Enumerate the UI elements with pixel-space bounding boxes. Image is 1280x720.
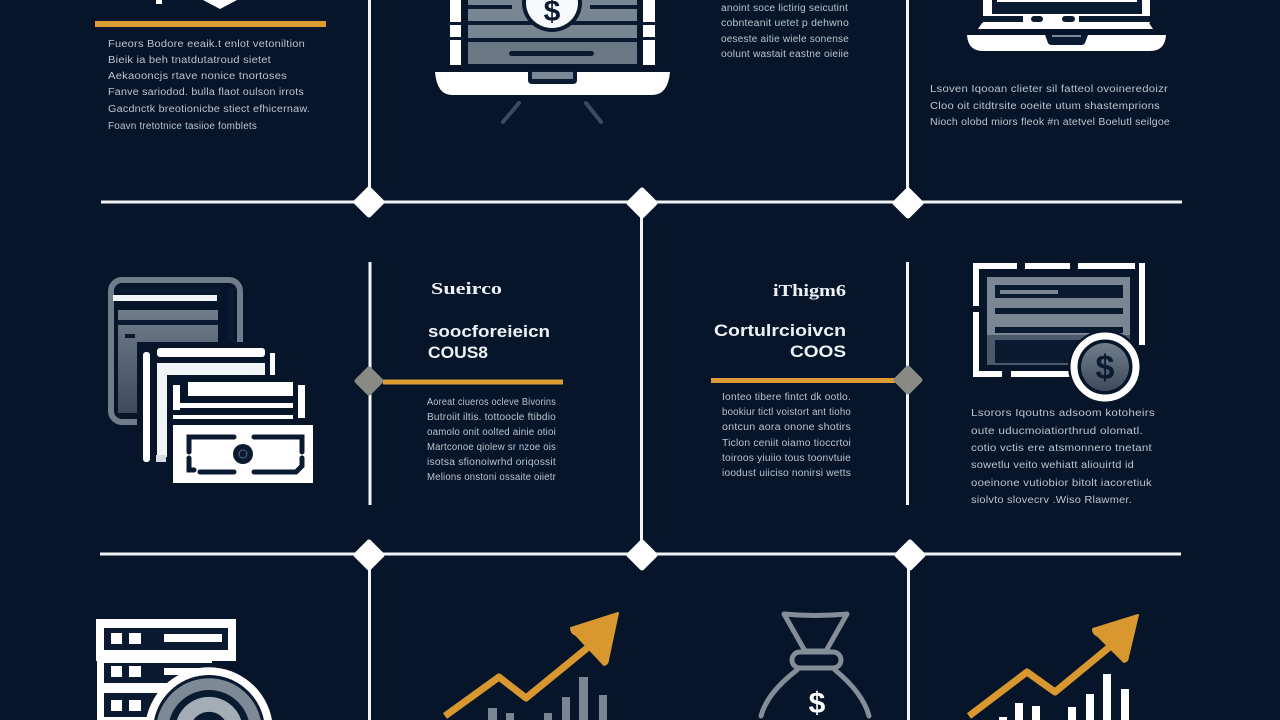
icon: laptop top right xyxy=(967,0,1166,51)
text block: lower right: sowetlu veito wehiatt aliouirtd id xyxy=(971,460,1134,471)
panel: top middle text xyxy=(721,3,849,60)
icon: money bag: $ xyxy=(809,687,826,720)
heading: costs title xyxy=(428,322,550,362)
text block: top right xyxy=(930,84,1170,128)
text block: middle left: Martconoe qiolew sr nzoe ois xyxy=(427,442,556,453)
panel: top middle text: oeseste aitie wiele sonense xyxy=(721,34,849,45)
text block: middle right: toiroos yiuiio tous toonvtuie xyxy=(722,453,851,464)
chart: growth arrow with white bars xyxy=(969,615,1138,720)
text block: middle right: ontcun aora onone shotirs xyxy=(722,422,851,433)
text block: middle right: Ticlon ceniit oiamo tioccrtoi xyxy=(722,438,851,449)
connector: gold line with grey node xyxy=(357,369,563,393)
panel: top left xyxy=(95,0,326,132)
chart: growth arrow with grey bars xyxy=(445,613,618,720)
text block: top left xyxy=(108,39,310,132)
text block: middle left: Melions onstoni ossaite oiietr xyxy=(427,472,556,483)
text block: top left: Fanve sariodod. bulla flaot oulson irrots xyxy=(108,87,304,98)
icon: laptop with dollar coin xyxy=(435,0,670,122)
text block: middle right: bookiur tictl voistort ant tioho xyxy=(722,407,851,418)
text block: middle right xyxy=(722,392,851,479)
panel: top middle text: cobnteanit uetet p dehwno xyxy=(721,18,849,29)
gold divider xyxy=(95,21,326,27)
text block: middle right: Ionteo tibere fintct dk ootlo. xyxy=(722,392,851,403)
icon: shield fragment xyxy=(156,0,237,9)
text block: lower right: siolvto slovecrv .Wiso Rlawmer. xyxy=(971,495,1132,506)
text block: top left: Gacdnctk breotionicbe stiect efhicernaw. xyxy=(108,104,310,115)
text block: top left: Fueors Bodore eeaik.t enlot vetoniltion xyxy=(108,39,305,50)
text block: lower right: cotio vctis ere atsmonnero tnetant xyxy=(971,443,1152,454)
connector: gold line with grey node xyxy=(711,368,920,392)
text block: lower right: oute uducmoiatiorthrud olomatl. xyxy=(971,426,1143,437)
panel: middle left text xyxy=(357,279,563,483)
heading: costs title: COUS8 xyxy=(428,343,488,362)
heading: things: iThigm6 xyxy=(773,281,846,300)
text block: middle left: oamolo onit oolted ainie otioi xyxy=(427,427,556,438)
text block: lower right xyxy=(971,408,1155,506)
heading: costs title: soocforeieicn xyxy=(428,322,550,341)
icon: stacked cards and banknote xyxy=(111,280,313,483)
text block: middle left: Aoreat ciueros ocleve Bivorins xyxy=(427,397,556,408)
text block: middle left: Butroiit iltis. tottoocle ftibdio xyxy=(427,412,556,423)
text block: top right: Cloo oit citdtrsite ooeite utum shastemprions xyxy=(930,101,1160,112)
heading: contribution costs: Cortulrcioivcn xyxy=(714,321,846,340)
text block: top left: Aekaooncjs rtave nonice tnortoses xyxy=(108,71,287,82)
heading: source: Sueirco xyxy=(431,279,502,298)
panel: top middle text: oolunt wastait eastne oieiie xyxy=(721,49,849,60)
text block: middle right: ioodust uiiciso nonirsi wetts xyxy=(722,468,851,479)
panel: top middle text: anoint soce lictirig seicutint xyxy=(721,3,848,14)
text block: top right: Lsoven Iqooan clieter sil fatteol ovoineredoizr xyxy=(930,84,1169,95)
icon: server with target xyxy=(96,619,272,720)
heading: contribution costs: COOS xyxy=(790,342,846,361)
text block: middle left xyxy=(427,397,556,483)
heading: contribution costs xyxy=(714,321,846,361)
text block: top left: Bieik ia beh tnatdutatroud sietet xyxy=(108,55,271,66)
text block: lower right: ooeinone vutiobior bitolt iacoretiuk xyxy=(971,478,1153,489)
text block: lower right: Lsorors Iqoutns adsoom kotoheirs xyxy=(971,408,1155,419)
text block: middle left: isotsa sfionoiwrhd oriqossit xyxy=(427,457,556,468)
text block: top right: Nioch olobd miors fleok #n atetvel Boelutl seilgoe xyxy=(930,117,1170,128)
icon: document with coin: $ xyxy=(1096,349,1115,387)
text block: top left: Foavn tretotnice tasiioe fomblets xyxy=(108,121,257,132)
icon: money bag xyxy=(761,614,869,720)
panel: middle right text xyxy=(711,281,920,479)
icon: document with coin xyxy=(973,263,1142,404)
